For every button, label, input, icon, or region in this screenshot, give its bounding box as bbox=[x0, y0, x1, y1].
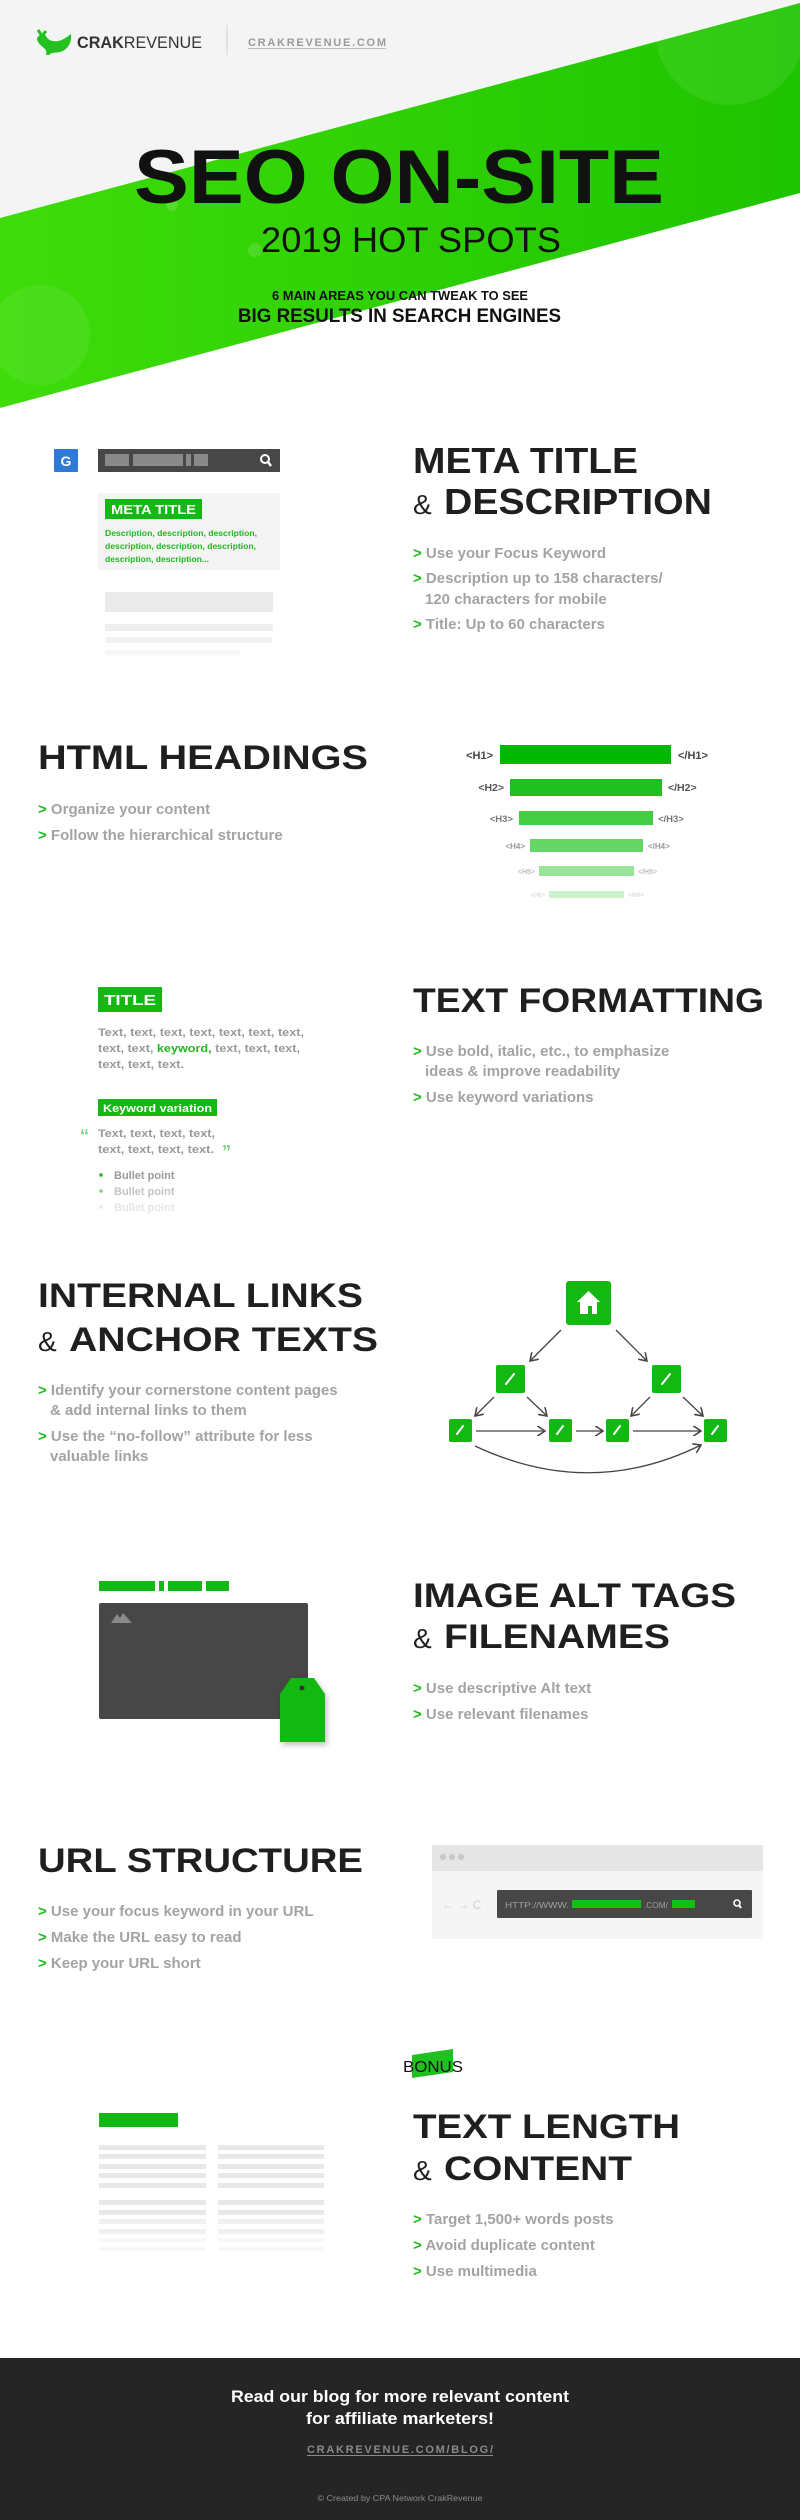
search result card: description, description... bbox=[105, 554, 209, 564]
icon: tag bbox=[280, 1678, 325, 1742]
panel: text formatting illustration: Text, text, text, text, bbox=[98, 1128, 215, 1140]
header url: CRAKREVENUE.COM bbox=[248, 37, 386, 49]
search result card: description, description, description, bbox=[105, 541, 256, 551]
heading: internal links: INTERNAL LINKS bbox=[38, 1277, 363, 1315]
bullets: image bbox=[413, 1680, 591, 1723]
heading: meta title & description bbox=[413, 440, 712, 522]
bullets: meta: > Description up to 158 characters/ bbox=[413, 570, 664, 587]
tagline: BIG RESULTS IN SEARCH ENGINES bbox=[238, 306, 561, 327]
chart: heading hierarchy bars: <H3> bbox=[490, 814, 513, 825]
chart: heading hierarchy bars bbox=[466, 745, 708, 899]
chart: heading hierarchy bars: <H6> bbox=[530, 893, 545, 899]
heading: text length bbox=[413, 2108, 680, 2188]
header logo bbox=[37, 30, 202, 55]
browser illustration: HTTP://WWW. bbox=[505, 1900, 569, 1910]
chart: heading hierarchy bars: </H2> bbox=[668, 782, 697, 794]
chart: heading hierarchy bars: </H4> bbox=[648, 842, 670, 851]
bullets: url: > Use your focus keyword in your URL bbox=[38, 1903, 313, 1920]
bullets: formatting: ideas & improve readability bbox=[425, 1063, 621, 1080]
heading: url structure: URL STRUCTURE bbox=[38, 1842, 363, 1880]
chart: heading hierarchy bars: </H1> bbox=[678, 750, 708, 762]
heading: meta title & description: META TITLE bbox=[413, 440, 638, 481]
footer: for affiliate marketers! bbox=[306, 2409, 494, 2428]
panel: text formatting illustration: Bullet point bbox=[114, 1170, 175, 1182]
panel: meta title illustration bbox=[54, 449, 280, 655]
subtitle: 2019 HOT SPOTS bbox=[261, 221, 561, 260]
chart: heading hierarchy bars: </H6> bbox=[628, 893, 645, 899]
bullets: text length: > Avoid duplicate content bbox=[413, 2237, 595, 2254]
bullets: links: & add internal links to them bbox=[50, 1402, 247, 1419]
search result card: Description, description, description, bbox=[105, 528, 257, 538]
bullets: links: valuable links bbox=[50, 1448, 148, 1465]
search bar bbox=[98, 449, 280, 472]
panel: text formatting illustration: Keyword variation bbox=[103, 1103, 212, 1115]
panel: text formatting illustration: “ bbox=[80, 1126, 89, 1146]
chart: heading hierarchy bars: <H2> bbox=[478, 782, 504, 794]
chart: heading hierarchy bars: <H1> bbox=[466, 750, 493, 762]
panel: text length illustration bbox=[99, 2113, 324, 2251]
heading: text length: & bbox=[413, 2155, 432, 2186]
bullets: meta: > Title: Up to 60 characters bbox=[413, 616, 605, 633]
heading: meta title & description: & bbox=[413, 489, 432, 520]
bullets: url: > Keep your URL short bbox=[38, 1955, 201, 1972]
bonus badge: BONUS bbox=[403, 2059, 463, 2076]
browser illustration bbox=[432, 1845, 763, 1939]
tagline: 6 MAIN AREAS YOU CAN TWEAK TO SEE bbox=[272, 288, 528, 303]
heading: image alt tags: & bbox=[413, 1623, 432, 1654]
browser illustration: ← → C bbox=[442, 1898, 482, 1912]
hero green band bbox=[0, 0, 800, 408]
bullets: links bbox=[38, 1382, 338, 1465]
bullets: url: > Make the URL easy to read bbox=[38, 1929, 242, 1946]
panel: text formatting illustration: text, text, keyword, text, text, text, bbox=[98, 1043, 300, 1055]
panel: text formatting illustration bbox=[80, 987, 304, 1214]
heading: meta title & description: DESCRIPTION bbox=[444, 481, 712, 522]
bullets: headings bbox=[38, 801, 283, 844]
icon: whale bbox=[37, 30, 71, 55]
heading: html headings: HTML HEADINGS bbox=[38, 739, 368, 777]
panel: text formatting illustration: ” bbox=[222, 1142, 231, 1162]
footer link: CRAKREVENUE.COM/BLOG/ bbox=[307, 2444, 493, 2456]
bullets: headings: > Follow the hierarchical structure bbox=[38, 827, 283, 844]
bullets: url bbox=[38, 1903, 313, 1972]
chart: heading hierarchy bars: <H5> bbox=[518, 869, 535, 876]
panel: text formatting illustration: text, text, text. bbox=[98, 1059, 184, 1071]
chart: heading hierarchy bars: </H3> bbox=[658, 814, 684, 825]
placeholder result lines bbox=[105, 592, 273, 655]
bullets: text length: > Use multimedia bbox=[413, 2263, 537, 2280]
browser illustration: .COM/ bbox=[644, 1900, 669, 1910]
bullets: formatting bbox=[413, 1043, 669, 1106]
bullets: meta: 120 characters for mobile bbox=[425, 591, 607, 608]
icon: google G: G bbox=[61, 453, 72, 469]
heading: image alt tags: FILENAMES bbox=[444, 1618, 670, 1656]
icon: home bbox=[566, 1281, 611, 1325]
bullets: meta bbox=[413, 545, 664, 633]
search result card bbox=[98, 493, 280, 570]
panel: image alt illustration bbox=[99, 1581, 325, 1742]
heading: image alt tags: IMAGE ALT TAGS bbox=[413, 1577, 736, 1615]
panel: text formatting illustration: Bullet point bbox=[114, 1186, 175, 1198]
bullets: formatting: > Use bold, italic, etc., to emphasize bbox=[413, 1043, 669, 1060]
bullets: formatting: > Use keyword variations bbox=[413, 1089, 594, 1106]
heading: internal links: & bbox=[38, 1326, 57, 1357]
chart: heading hierarchy bars: <H4> bbox=[505, 842, 525, 851]
search result card: META TITLE bbox=[111, 502, 196, 517]
footer: Read our blog for more relevant content bbox=[231, 2387, 569, 2406]
icon: mountain bbox=[111, 1613, 132, 1623]
footer bbox=[0, 2358, 800, 2520]
bullets: image: > Use descriptive Alt text bbox=[413, 1680, 591, 1697]
title bbox=[134, 135, 664, 260]
icon: google G bbox=[54, 449, 78, 472]
tagline bbox=[238, 288, 561, 327]
bullets: meta: > Use your Focus Keyword bbox=[413, 545, 606, 562]
panel: text formatting illustration: Text, text, text, text, text, text, text, bbox=[98, 1027, 304, 1039]
heading: text length: CONTENT bbox=[444, 2150, 632, 2188]
heading: text length: TEXT LENGTH bbox=[413, 2108, 680, 2146]
bullets: image: > Use relevant filenames bbox=[413, 1706, 589, 1723]
chart: link tree diagram bbox=[449, 1281, 727, 1473]
heading: internal links bbox=[38, 1277, 378, 1359]
icon: link boxes bbox=[449, 1365, 727, 1442]
heading: internal links: ANCHOR TEXTS bbox=[69, 1321, 378, 1359]
heading: image alt tags bbox=[413, 1577, 736, 1656]
heading: text formatting: TEXT FORMATTING bbox=[413, 982, 764, 1020]
bullets: links: > Identify your cornerstone content pages bbox=[38, 1382, 338, 1399]
bullets: text length bbox=[413, 2211, 614, 2280]
title: SEO ON-SITE bbox=[134, 135, 664, 220]
bullets: text length: > Target 1,500+ words posts bbox=[413, 2211, 614, 2228]
bonus badge bbox=[403, 2049, 463, 2078]
bullets: headings: > Organize your content bbox=[38, 801, 210, 818]
copyright: © Created by CPA Network CrakRevenue bbox=[318, 2494, 483, 2503]
chart: heading hierarchy bars: </H5> bbox=[638, 869, 657, 876]
panel: text formatting illustration: text, text, text, text. bbox=[98, 1144, 214, 1156]
bullets: links: > Use the “no-follow” attribute for less bbox=[38, 1428, 313, 1445]
panel: text formatting illustration: TITLE bbox=[104, 992, 156, 1009]
panel: text formatting illustration: Bullet point bbox=[114, 1202, 175, 1214]
header logo: CRAKREVENUE bbox=[77, 33, 202, 52]
